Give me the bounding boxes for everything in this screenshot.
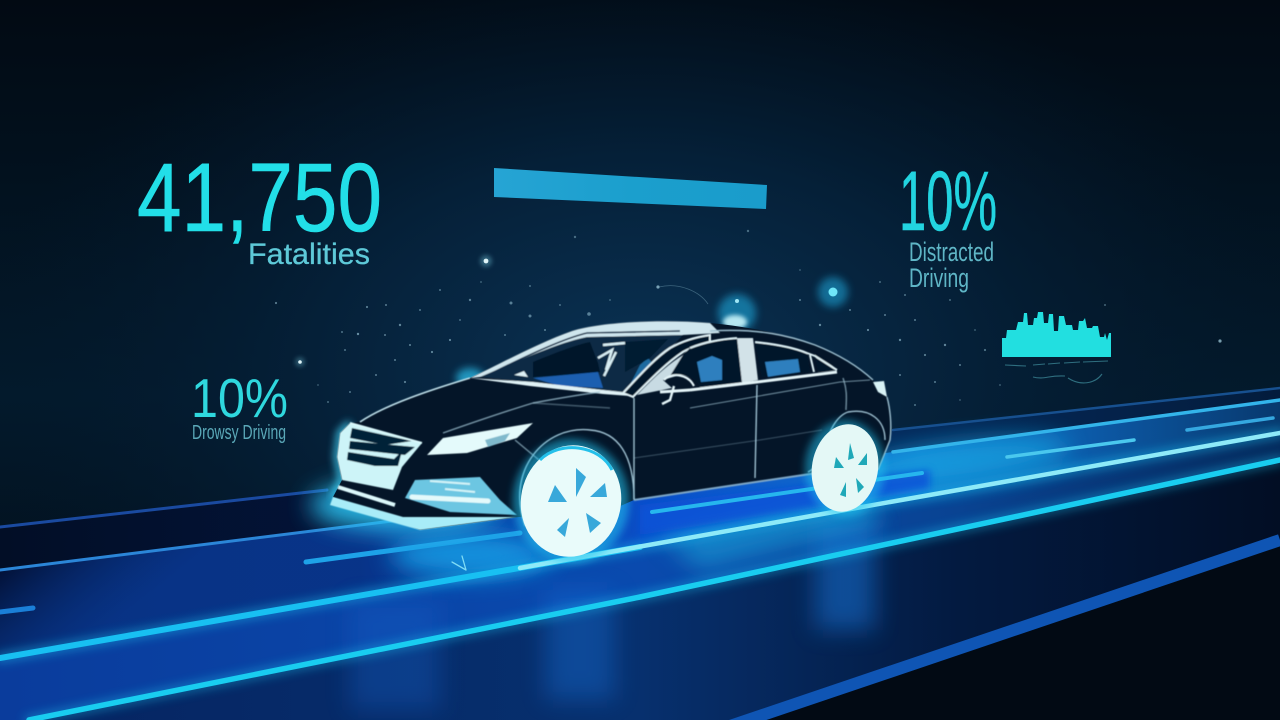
A-pillar (623, 335, 710, 397)
bumper (330, 497, 517, 530)
front grille and bumper (330, 423, 517, 530)
glowing orb above roof (659, 286, 756, 332)
lane lines (0, 388, 1280, 720)
lower vent (405, 477, 517, 515)
label: Drowsy Driving (192, 422, 286, 444)
blue header bar (494, 168, 767, 209)
percentage: 10% (191, 367, 288, 429)
label: Fatalities (248, 238, 370, 271)
big number: 41,750 (137, 143, 382, 252)
front wheel (510, 436, 632, 566)
car body (333, 321, 891, 530)
body outlines (360, 330, 891, 526)
stat: 10% distracted driving (899, 154, 997, 293)
door windows (670, 338, 837, 387)
tail light (873, 381, 887, 397)
windshield base (470, 378, 630, 396)
road surface (0, 388, 1280, 720)
star field (275, 230, 1222, 406)
stat: 10% drowsy driving (191, 367, 288, 444)
roof band (470, 321, 720, 378)
B-pillar and window frames (660, 338, 837, 404)
car glow (310, 479, 500, 531)
headlight (427, 423, 533, 455)
percentage: 10% (899, 154, 997, 248)
stat: 41,750 fatalities (137, 143, 382, 271)
car (310, 321, 891, 566)
chart caption (1005, 361, 1108, 383)
seats (697, 356, 800, 382)
road glow and reflections (350, 429, 1072, 710)
windshield glass and cabin (480, 335, 683, 392)
label line two: Driving (909, 263, 969, 293)
glowing orb right (818, 277, 848, 307)
label: Distracted (909, 237, 994, 267)
rear wheel (805, 419, 885, 517)
mini skyline chart (1002, 312, 1111, 383)
